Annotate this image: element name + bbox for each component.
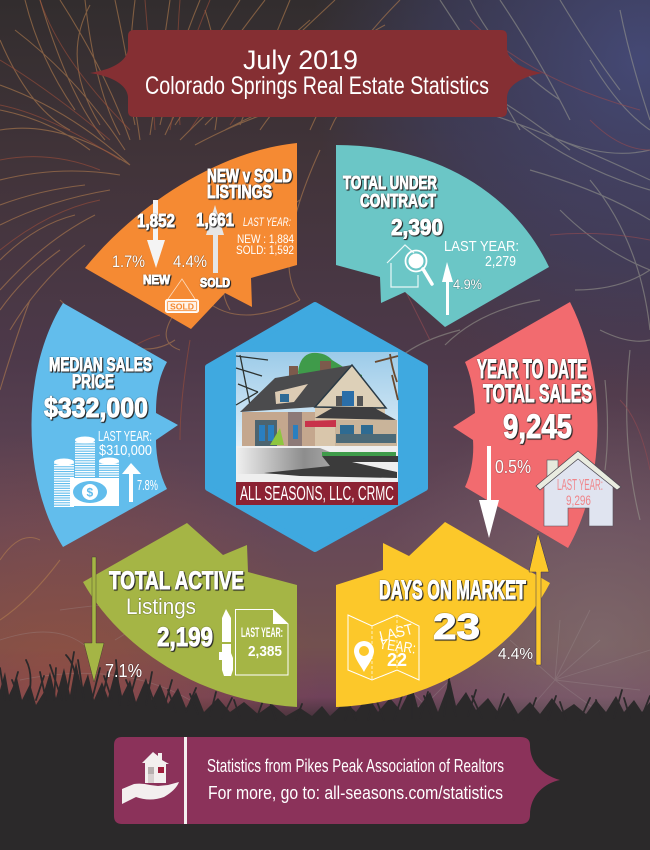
last year new: NEW : 1,884: [237, 232, 294, 246]
house illustration: [236, 352, 398, 482]
last year handwritten label 2: YEAR:: [378, 636, 417, 658]
panel: total under contract: [336, 145, 549, 327]
heading: listings: LISTINGS: [207, 181, 272, 202]
number: active listings: 2,199: [157, 622, 213, 652]
heading: total sales: TOTAL SALES: [483, 380, 592, 408]
number: total sales: 9,245: [503, 408, 572, 446]
grass silhouette: [0, 652, 650, 850]
title banner: [90, 30, 543, 117]
icon: sold sign: SOLD: [170, 302, 194, 312]
panel: new v sold listings: [85, 143, 297, 329]
percent: 0.5%: [495, 457, 531, 477]
icon: pen: [219, 609, 233, 676]
heading: total active: TOTAL ACTIVE: [109, 567, 244, 595]
number: median price: $332,000: [44, 392, 148, 423]
title: subject: Colorado Springs Real Estate Statistics: [145, 72, 489, 100]
panel: center hexagon: [208, 305, 425, 549]
arrow: down: [479, 446, 499, 538]
arrow: sold up: [206, 205, 224, 273]
last year handwritten label: LAST: [378, 621, 415, 646]
number: new: 1,852: [137, 210, 175, 231]
icon: sold sign: [166, 279, 198, 312]
icon: house with last year: [536, 451, 621, 526]
percent: 7.8%: [137, 477, 158, 494]
number: sold: 1,661: [196, 209, 234, 230]
number: under contract: 2,390: [391, 214, 443, 240]
last year value: 22: [387, 650, 407, 670]
percent: 4.4%: [498, 646, 533, 663]
last year value: 2,279: [485, 253, 516, 270]
icon: map pin: [354, 641, 374, 672]
last year value: 2,385: [248, 643, 282, 660]
arrow: down: [84, 557, 104, 682]
icon: house in hand: [122, 752, 179, 804]
last year label: LAST YEAR:: [241, 624, 283, 640]
icon: document: [236, 610, 288, 675]
percent: 4.9%: [453, 276, 482, 292]
panel: days on market: [336, 522, 550, 707]
last year label: LAST YEAR:: [444, 238, 519, 255]
footer banner: [114, 737, 560, 824]
icon: coins and bill: $: [86, 486, 94, 500]
footer text: source: Statistics from Pikes Peak Association of Realtors: [207, 755, 504, 776]
logo name band: ALL SEASONS, LLC, CRMC: [240, 483, 394, 505]
last year sold: SOLD: 1,592: [236, 243, 294, 257]
heading: contract: CONTRACT: [360, 190, 437, 211]
percent: sold: 4.4%: [173, 252, 207, 271]
number: days on market: 23: [433, 606, 480, 647]
panel: total active listings: [83, 523, 297, 707]
label: sold: SOLD: [200, 275, 230, 290]
heading: days on market: DAYS ON MARKET: [379, 575, 526, 605]
logo name band: [236, 482, 398, 505]
footer text: link: For more, go to: all-seasons.com/statistics: [208, 782, 503, 803]
panel: year to date total sales: [453, 302, 621, 548]
percent: 7.1%: [105, 660, 142, 681]
last year value: 9,296: [566, 492, 591, 508]
last year value: $310,000: [99, 442, 152, 459]
heading: median sales: MEDIAN SALES: [49, 354, 152, 376]
heading: listings: Listings: [126, 594, 196, 619]
last year label: LAST YEAR:: [98, 428, 152, 445]
icon: house and magnifier: [387, 245, 432, 287]
arrow: new down: [147, 200, 165, 268]
heading: total under: TOTAL UNDER: [343, 172, 437, 193]
last year label: LAST YEAR:: [557, 477, 603, 494]
arrow: up: [442, 262, 453, 315]
last year label: LAST YEAR:: [243, 217, 291, 229]
title: month: July 2019: [243, 45, 358, 75]
arrow: up: [529, 533, 549, 665]
icon: coins and bill: [54, 436, 119, 507]
panel: median sales price: [32, 303, 178, 547]
label: new: NEW: [143, 272, 171, 287]
percent: new: 1.7%: [112, 252, 145, 271]
icon: map: [348, 615, 419, 680]
heading: price: PRICE: [72, 371, 114, 393]
heading: new v sold: NEW v SOLD: [207, 165, 292, 186]
arrow: up: [122, 463, 141, 502]
